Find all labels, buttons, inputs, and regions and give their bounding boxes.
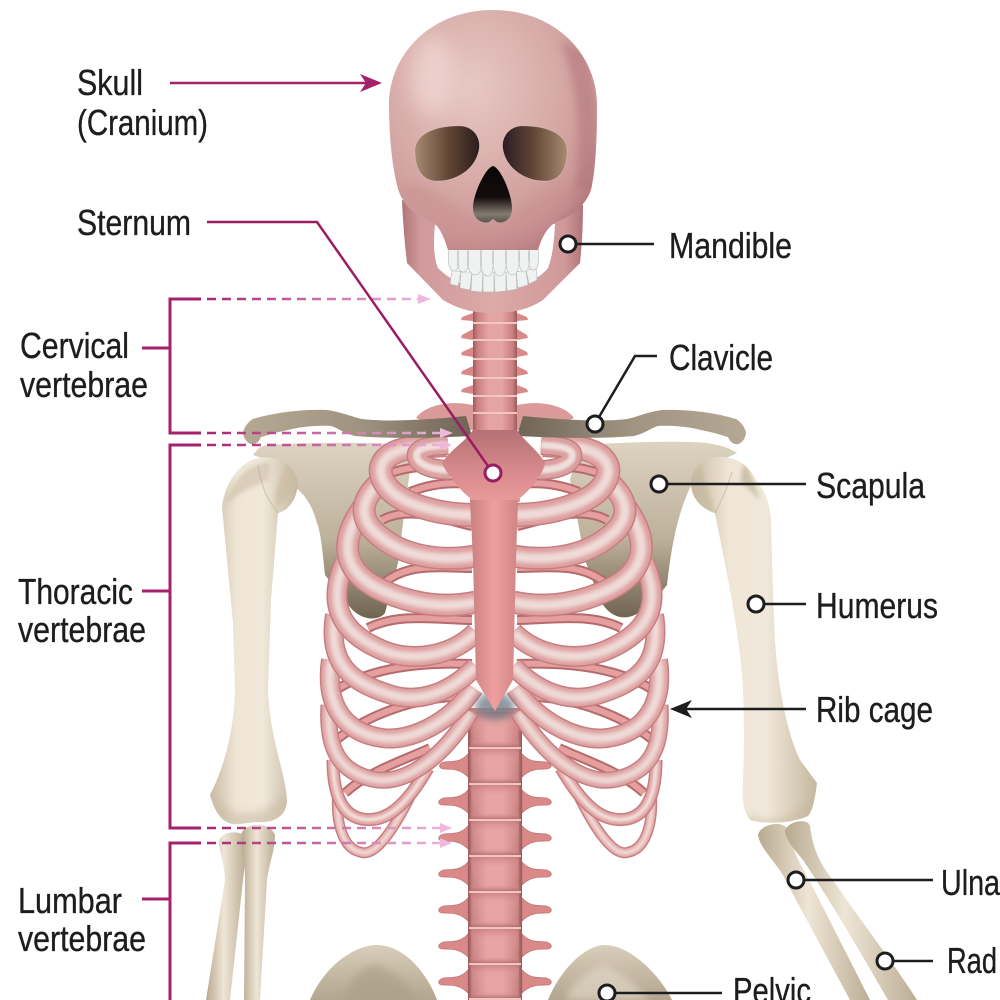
bracket: lumbar vertebrae [142,838,452,1000]
shadow below sternum [475,692,515,720]
label: Mandible: Mandible [669,225,792,266]
right scapula [570,442,737,617]
bracket: cervical vertebrae [142,294,453,438]
label: vertebrae (lumbar): vertebrae [18,918,146,959]
scapula leader [651,476,806,492]
clavicles [243,410,746,444]
label: Scapula: Scapula [816,465,926,506]
humerus leader [748,596,806,612]
rib cage right [513,445,660,853]
sternum leader [207,222,501,481]
teeth [448,249,539,292]
label: Humerus: Humerus [816,585,938,626]
label: Clavicle: Clavicle [669,337,773,378]
label: vertebrae (thoracic): vertebrae [18,609,146,650]
humerus right [690,457,817,830]
transverse processes [439,754,551,993]
lumbar and thoracic spine [439,708,551,1000]
humerus left [210,457,298,830]
rib cage arrow [670,700,806,718]
pelvic leader [599,985,722,1000]
nose [473,166,512,222]
skull arrow [170,74,382,92]
label: Cranium: (Cranium) [77,102,208,143]
pelvic bones [310,945,672,1000]
forearm right: ulna and radius [758,821,917,1000]
radius leader [877,953,933,969]
forearm left: radius and ulna [206,825,275,1000]
label: vertebrae (cervical): vertebrae [20,364,148,405]
ulna leader [788,872,933,888]
rib cage left [329,445,476,853]
label: Cervical: Cervical [20,325,129,366]
sternum [442,430,545,711]
mandible leader [560,236,654,252]
label: Thoracic: Thoracic [18,571,133,612]
bracket: thoracic vertebrae [142,440,452,833]
mandible [402,200,583,313]
left scapula [253,443,440,619]
label: Skull: Skull [77,62,143,103]
back ribs right [517,467,654,793]
clavicle leader [587,356,657,432]
eye sockets [415,126,479,181]
label: Rib cage: Rib cage [816,689,933,730]
label: Lumbar: Lumbar [18,880,122,921]
skull cranium [389,10,597,250]
back ribs [335,467,472,793]
cervical spine [416,310,574,434]
label: Sternum: Sternum [77,202,191,243]
